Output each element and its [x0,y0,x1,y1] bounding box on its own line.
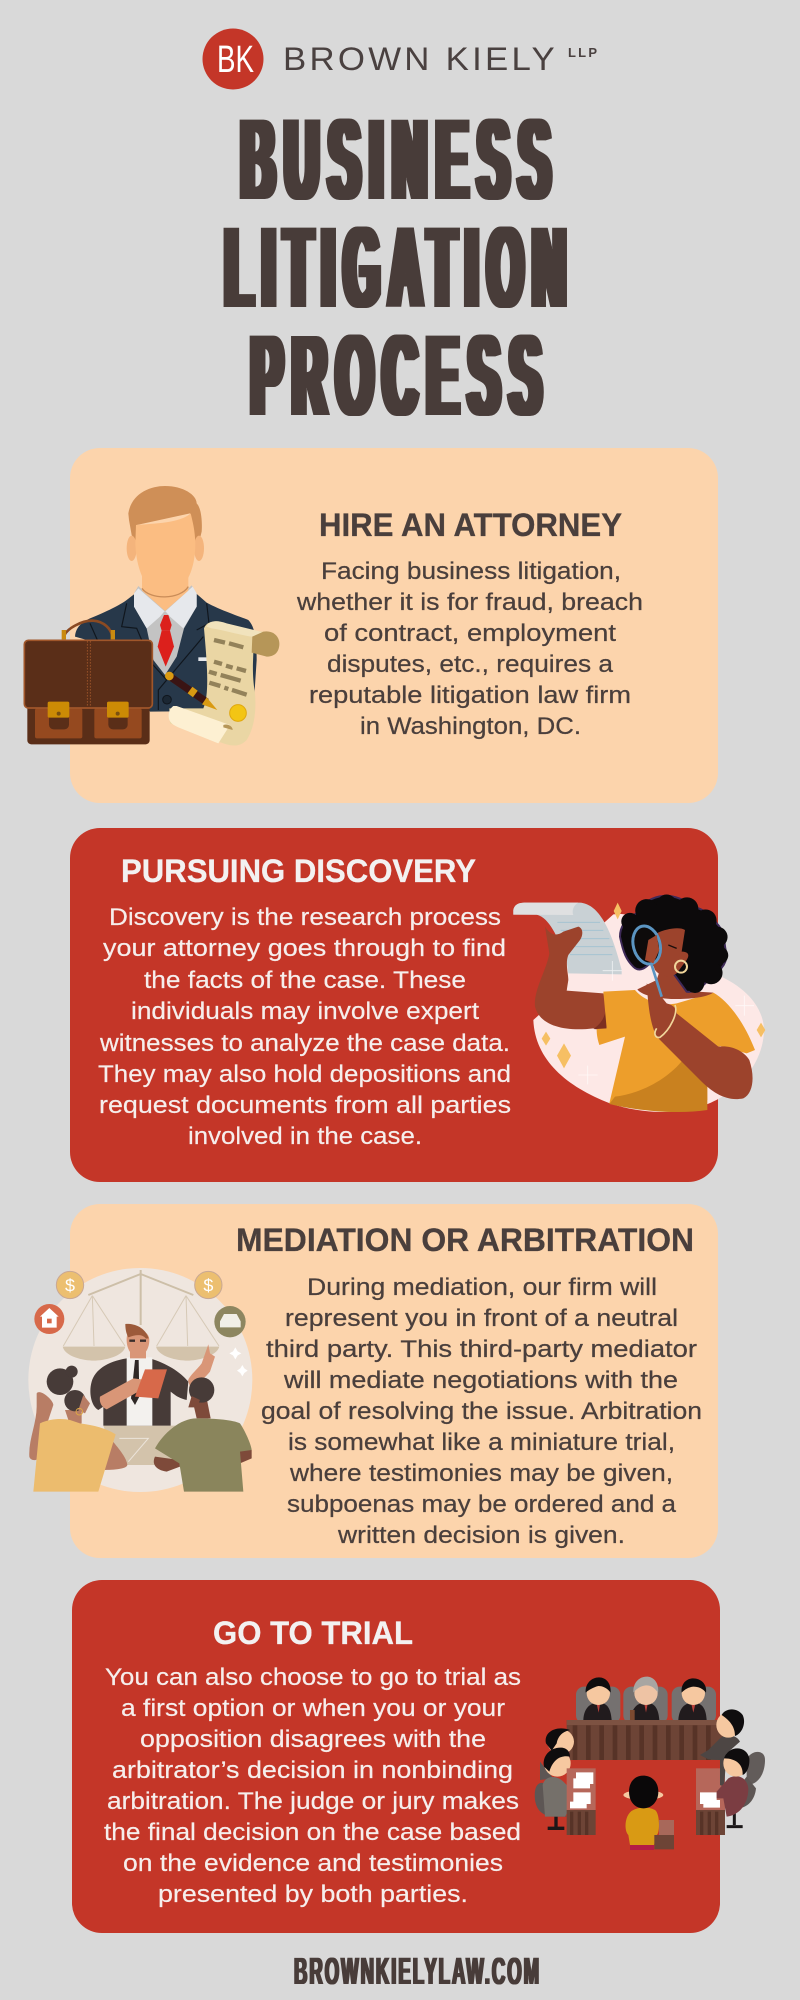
body text [98,904,511,1150]
body text: the facts of the case. These [144,967,466,994]
body text: opposition disagrees with the [140,1726,486,1753]
body text: request documents from all parties [99,1092,511,1119]
panel background [70,1204,718,1558]
body text: Facing business litigation, [321,558,621,585]
body text: in Washington, DC. [360,713,581,740]
heading: pursuing discovery: PURSUING DISCOVERY [121,853,476,889]
panel: mediation or arbitration [28,1204,718,1558]
logo: Brown Kiely LLP [202,28,597,90]
logo: Brown Kiely LLP: BK [217,39,254,81]
text: BROWNKIELYLAW.COM [294,1951,541,1993]
body text: arbitration. The judge or jury makes [107,1788,519,1815]
body text: You can also choose to go to trial as [105,1664,521,1691]
panel: go to trial [72,1580,765,1933]
body text: is somewhat like a miniature trial, [288,1429,675,1456]
body text: witnesses to analyze the case data. [99,1030,510,1057]
body text: individuals may involve expert [131,998,479,1025]
body text: arbitrator’s decision in nonbinding [112,1757,513,1784]
icon: attorney with briefcase and scroll [24,486,279,746]
logo: Brown Kiely LLP: BROWN KIELY [283,41,558,77]
body text: whether it is for fraud, breach [296,589,643,616]
logo: Brown Kiely LLP: LLP [568,45,597,60]
body text: presented by both parties. [158,1881,468,1908]
heading: go to trial: GO TO TRIAL [213,1615,413,1651]
title [225,96,575,440]
body text: Discovery is the research process [109,904,501,931]
body text: During mediation, our firm will [307,1274,657,1301]
panel background [70,448,718,803]
panel background [70,828,718,1182]
panel: pursuing discovery [70,828,765,1182]
body text: the final decision on the case based [104,1819,521,1846]
body text: represent you in front of a neutral [285,1305,678,1332]
body text [104,1664,521,1908]
icon: mediator with scales and two parties: $ [65,1275,75,1295]
heading: mediation or arbitration: MEDIATION OR ARBITRATION [236,1222,694,1258]
icon: mediator with scales and two parties: $ [203,1275,213,1295]
body text: involved in the case. [188,1123,422,1150]
body text [261,1274,702,1549]
body text: on the evidence and testimonies [123,1850,503,1877]
body text: reputable litigation law firm [309,682,631,709]
icon: mediator with scales and two parties [28,1268,252,1492]
body text [296,558,643,740]
panel: hire an attorney [24,448,718,803]
icon: courtroom with judges and lawyers [535,1677,765,1850]
body text: goal of resolving the issue. Arbitration [261,1398,702,1425]
body text: where testimonies may be given, [289,1460,673,1487]
body text: third party. This third-party mediator [266,1336,697,1363]
body text: your attorney goes through to find [103,935,506,962]
heading: hire an attorney: HIRE AN ATTORNEY [319,507,622,543]
body text: will mediate negotiations with the [283,1367,678,1394]
body text: written decision is given. [337,1522,625,1549]
body text: of contract, employment [324,620,616,647]
body text: subpoenas may be ordered and a [287,1491,677,1518]
body text: a first option or when you or your [121,1695,505,1722]
body text: disputes, etc., requires a [327,651,614,678]
icon: woman with magnifier and document [513,894,765,1112]
body text: They may also hold depositions and [98,1061,511,1088]
panel background [72,1580,720,1933]
